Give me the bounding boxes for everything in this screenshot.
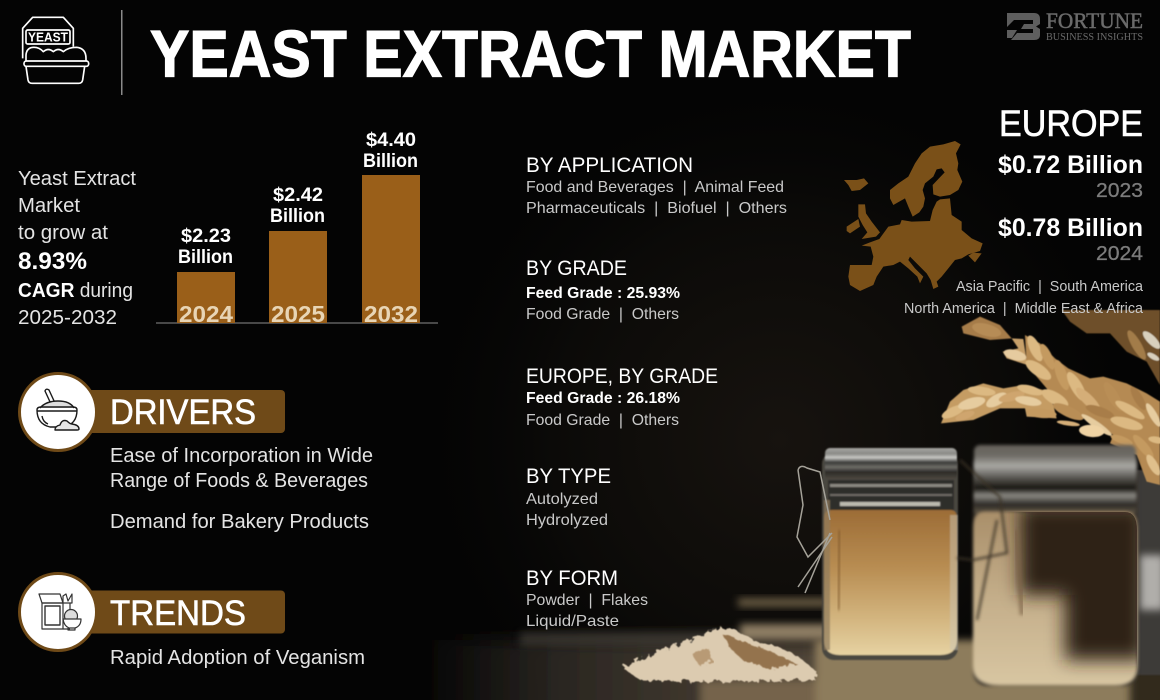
panel: by form bbox=[526, 567, 648, 630]
bar 2032: 2032 bbox=[364, 301, 418, 327]
trend 1: Rapid Adoption of Veganism bbox=[110, 647, 365, 669]
panel: Europe by grade: Food Grade | Others bbox=[526, 412, 679, 429]
title: YEAST EXTRACT MARKET bbox=[150, 16, 911, 90]
photo: powder pile bbox=[623, 627, 817, 682]
panel: by application: BY APPLICATION bbox=[526, 154, 693, 177]
photo: back jar bbox=[1132, 470, 1160, 675]
panel: Europe by grade: Feed Grade : 26.18% bbox=[526, 390, 680, 407]
map: Europe bbox=[844, 141, 983, 291]
CAGR text block: Market bbox=[18, 195, 80, 217]
bar 2024: $2.23 bbox=[181, 226, 231, 247]
panel: by application: Food and Beverages | Animal Feed bbox=[526, 179, 784, 196]
header icon: yeast package bbox=[23, 17, 89, 83]
panel: by grade: BY GRADE bbox=[526, 257, 627, 280]
bar 2032: $4.40 bbox=[366, 130, 416, 151]
other regions: Asia Pacific | South America bbox=[956, 278, 1144, 295]
driver 1: Ease of Incorporation in Wide bbox=[110, 445, 373, 467]
bar 2024: Billion bbox=[178, 247, 233, 268]
bar 2025 bbox=[269, 185, 327, 327]
bar 2025: 2025 bbox=[271, 301, 325, 327]
value 2024: $0.78 Billion bbox=[998, 214, 1143, 242]
panel: by grade: Feed Grade : 25.93% bbox=[526, 285, 680, 302]
panel: drivers bbox=[20, 374, 373, 533]
icon: bowl of flour bbox=[20, 374, 96, 450]
CAGR text block: 2025-2032 bbox=[18, 307, 117, 329]
photo: wheat stalks bbox=[940, 310, 1160, 485]
panel: by form: Liquid/Paste bbox=[526, 613, 619, 630]
panel: Europe figures: North America | Middle East & Africa bbox=[904, 300, 1144, 317]
CAGR text block bbox=[18, 168, 136, 329]
panel: by grade bbox=[526, 257, 680, 323]
panel: by form: BY FORM bbox=[526, 567, 618, 590]
trends heading: TRENDS bbox=[110, 594, 246, 633]
panel: Europe figures: 2024 bbox=[1096, 243, 1143, 265]
panel: by application bbox=[526, 154, 787, 217]
panel: by type bbox=[526, 465, 611, 529]
panel: by form: Powder | Flakes bbox=[526, 592, 648, 609]
CAGR text block: 8.93% bbox=[18, 248, 87, 275]
bar 2025: Billion bbox=[270, 206, 325, 227]
photo: left jar bbox=[797, 448, 958, 660]
Europe heading: EUROPE bbox=[999, 103, 1143, 144]
panel: by type: Autolyzed bbox=[526, 491, 598, 508]
panel: Europe figures: 2023 bbox=[1096, 180, 1143, 202]
CAGR text block: to grow at bbox=[18, 222, 108, 244]
bar 2032: Billion bbox=[363, 151, 418, 172]
value 2023: $0.72 Billion bbox=[998, 151, 1143, 179]
logo: Fortune Business Insights: BUSINESS INSIGHTS bbox=[1046, 31, 1143, 43]
icon label: YEAST: YEAST bbox=[28, 30, 68, 45]
panel: Europe figures bbox=[904, 103, 1144, 317]
photo: table surface bbox=[420, 598, 1160, 700]
driver 2: Demand for Bakery Products bbox=[110, 511, 369, 533]
panel: Europe by grade: EUROPE, BY GRADE bbox=[526, 365, 718, 388]
bar chart: market size bbox=[156, 130, 438, 327]
panel: trends bbox=[20, 574, 365, 669]
icon: food packages bbox=[20, 574, 96, 650]
CAGR text block: CAGR during bbox=[18, 280, 133, 302]
drivers heading: DRIVERS bbox=[110, 393, 256, 432]
panel: drivers: Range of Foods & Beverages bbox=[110, 470, 368, 492]
bar 2032 bbox=[362, 130, 420, 327]
photo: blurred wire clip between jars bbox=[957, 460, 1007, 620]
drivers banner bbox=[85, 390, 285, 433]
panel: Europe by grade bbox=[526, 365, 718, 429]
header divider bbox=[121, 10, 122, 95]
CAGR text block: Yeast Extract bbox=[18, 168, 136, 190]
panel: by type: Hydrolyzed bbox=[526, 512, 608, 529]
logo: Fortune Business Insights bbox=[1007, 8, 1143, 43]
logo: Fortune Business Insights: FORTUNE bbox=[1046, 8, 1143, 33]
panel: by grade: Food Grade | Others bbox=[526, 306, 679, 323]
trends banner bbox=[85, 590, 285, 634]
bar 2024: 2024 bbox=[179, 301, 233, 327]
photo: right jar bbox=[973, 445, 1145, 686]
panel: by type: BY TYPE bbox=[526, 465, 611, 488]
panel: by application: Pharmaceuticals | Biofuel | Others bbox=[526, 200, 787, 217]
bar 2025: $2.42 bbox=[273, 185, 323, 206]
bar 2024 bbox=[177, 226, 235, 327]
